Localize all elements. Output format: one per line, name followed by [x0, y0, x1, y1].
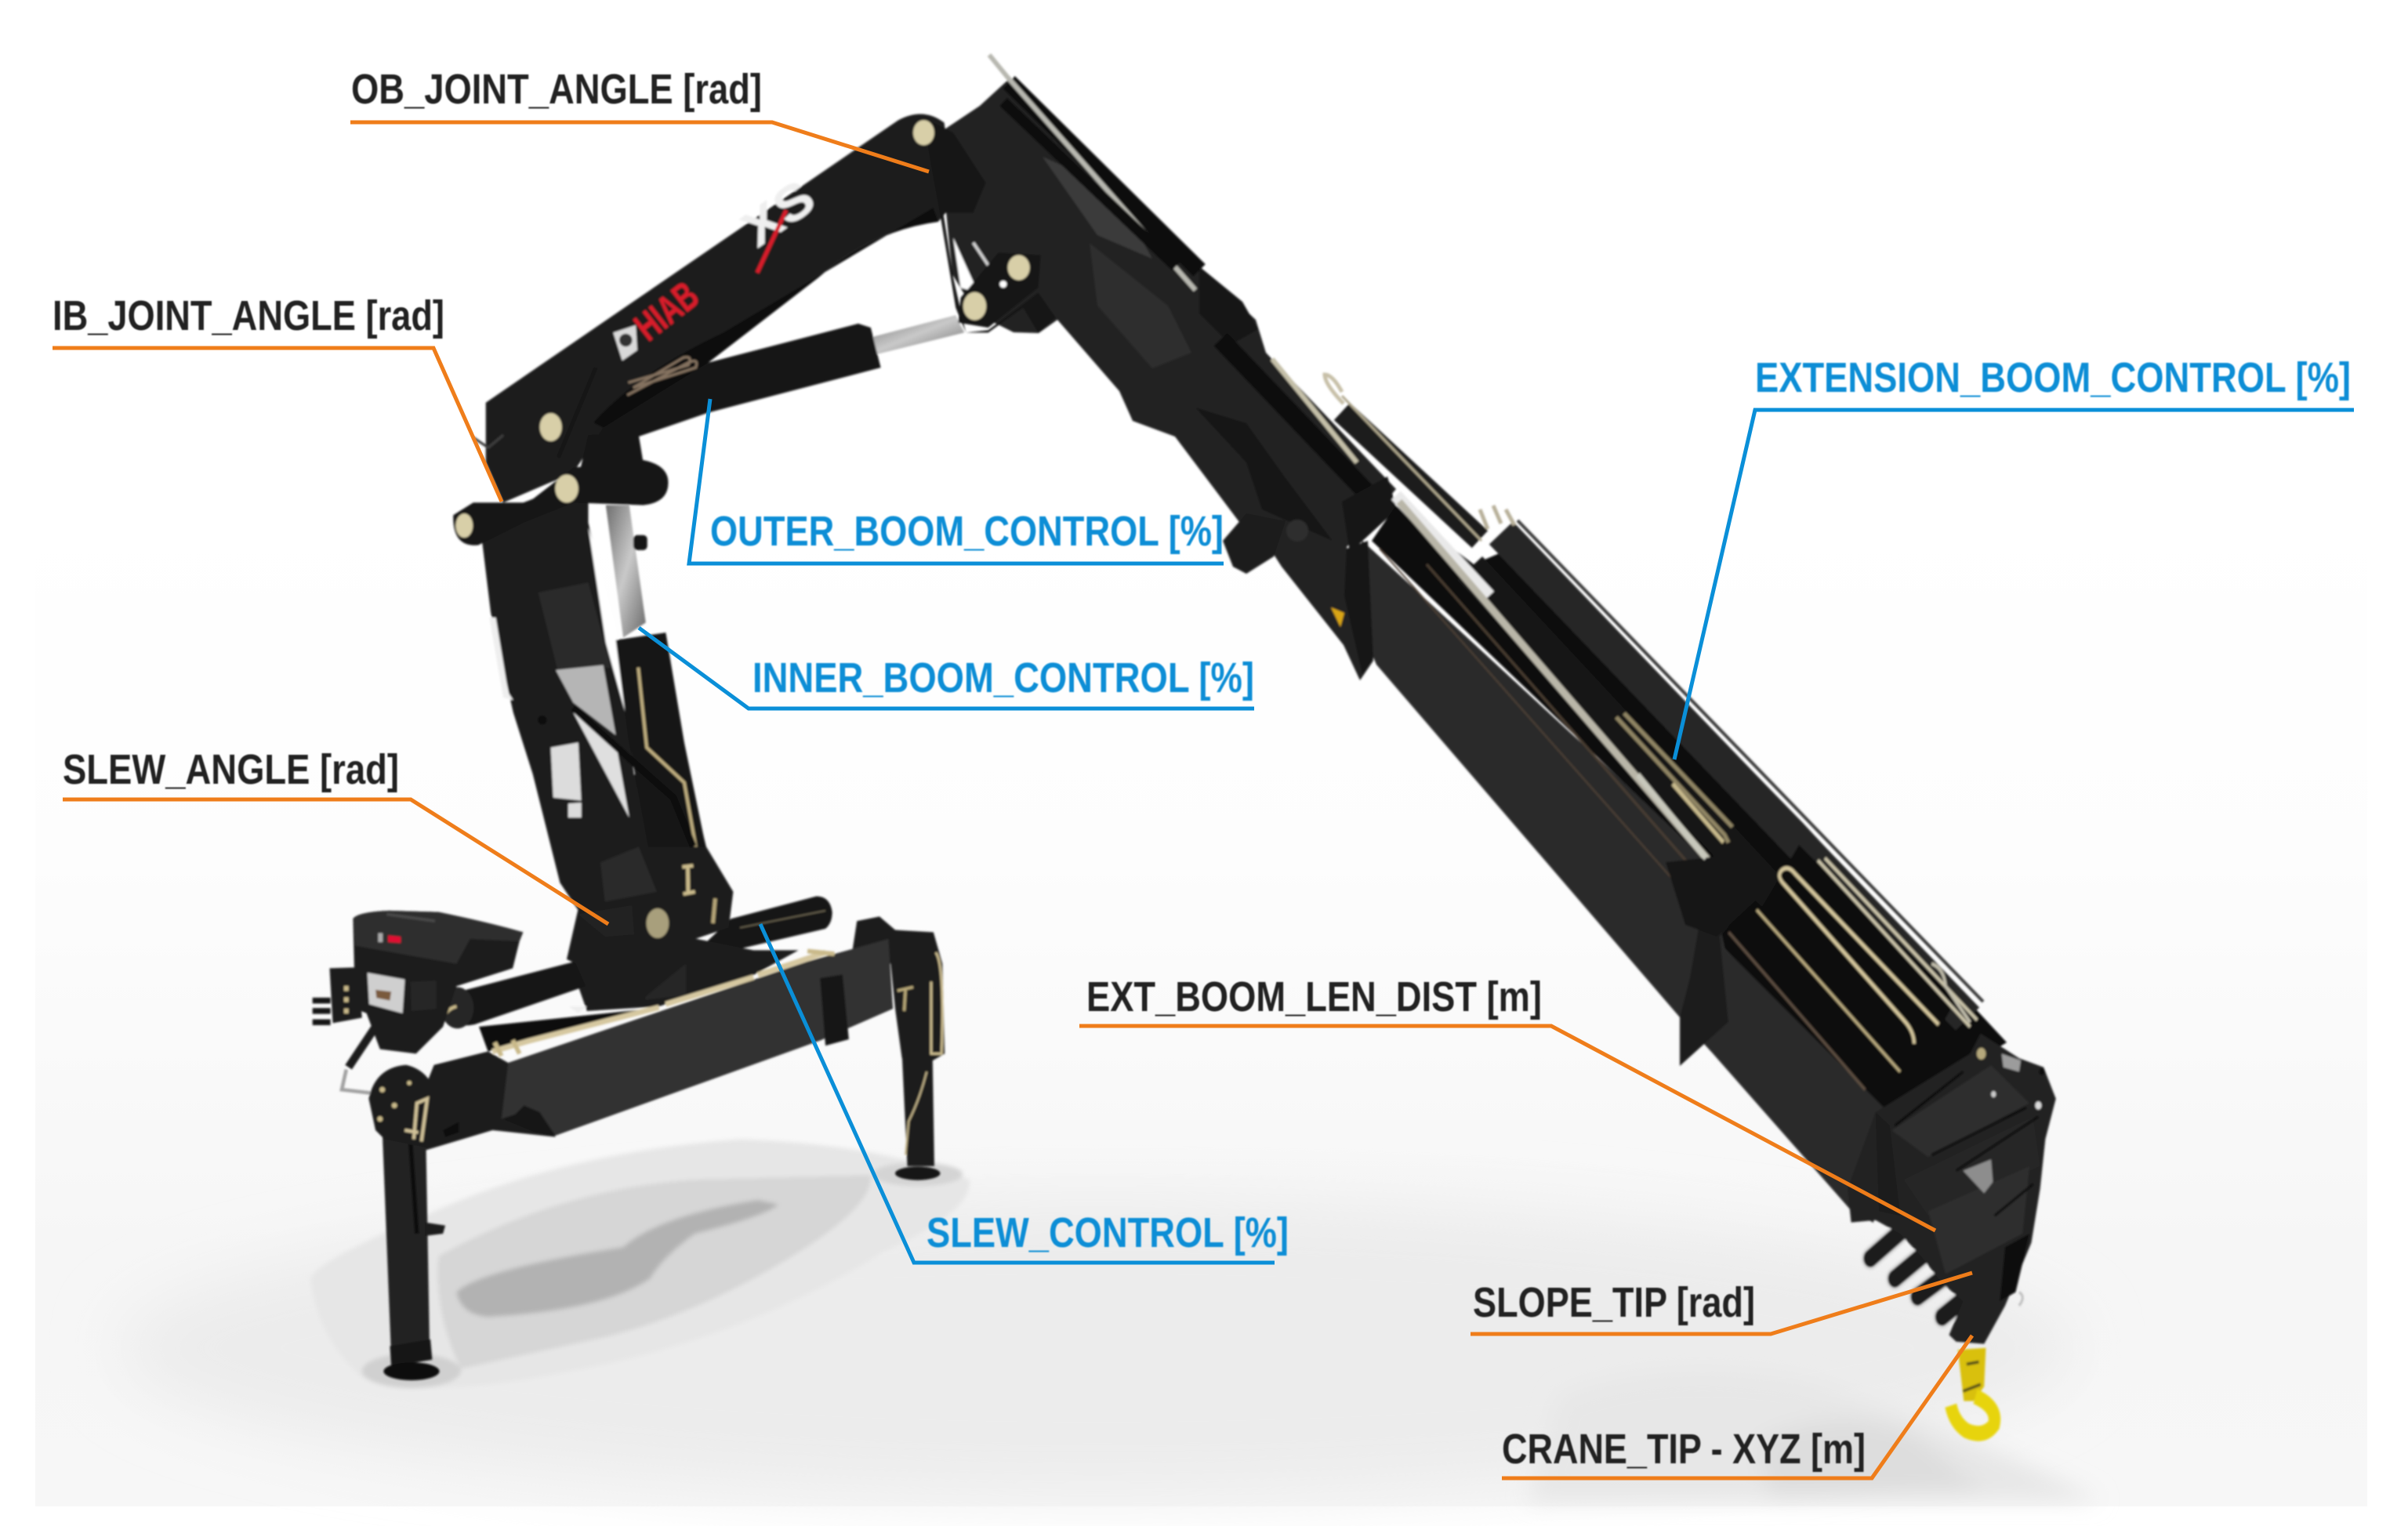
- label: IB_JOINT_ANGLE: [53, 292, 502, 502]
- box lower brown edge: [1380, 549, 1685, 893]
- label: OB_JOINT_ANGLE: OB_JOINT_ANGLE [rad]: [351, 66, 762, 113]
- chrome rail: [1396, 495, 1489, 596]
- control box: [313, 911, 523, 1093]
- tip rods and cables: [1637, 775, 1977, 1089]
- extension boom cylinders: [1470, 568, 1897, 1027]
- label: SLOPE_TIP: [1471, 1273, 1972, 1334]
- outer boom cylinder: [596, 315, 964, 437]
- beam box face: [502, 939, 893, 1136]
- crane base: beam, legs and control box: [313, 897, 945, 1380]
- label: SLEW_CONTROL: SLEW_CONTROL [%]: [927, 1209, 1289, 1256]
- Hiab logo: HIAB: [626, 273, 707, 350]
- rear slew cylinder: [686, 897, 832, 962]
- ground shadow under boom tip: [1529, 1371, 2101, 1501]
- front slew cylinder: [441, 959, 593, 1025]
- label: EXT_BOOM_LEN_DIST: [1079, 973, 1935, 1231]
- label: SLEW_ANGLE: [63, 746, 608, 924]
- label: INNER_BOOM_CONTROL: INNER_BOOM_CONTROL [%]: [752, 654, 1254, 701]
- sling loops: [1870, 1229, 1975, 1317]
- outer boom arm: [453, 114, 1056, 546]
- cable bundle: [1616, 713, 1732, 843]
- hose coil: [627, 357, 697, 395]
- inner boom pedestal: [533, 775, 733, 1004]
- inner boom rod: [606, 505, 646, 637]
- label: EXT_BOOM_LEN_DIST: EXT_BOOM_LEN_DIST [m]: [1086, 973, 1542, 1020]
- yellow hook: [1951, 1348, 1995, 1434]
- main boom: [941, 55, 2007, 1223]
- label: SLEW_CONTROL: [760, 924, 1289, 1263]
- label: OB_JOINT_ANGLE: [350, 66, 929, 172]
- XS logo: XS: [731, 169, 825, 258]
- first boom section: [941, 79, 1396, 680]
- second boom section: [1347, 541, 1897, 1223]
- link plates and upper knuckle: [923, 118, 1056, 332]
- slew housing: [574, 937, 799, 1011]
- Hiab logo: [613, 273, 707, 361]
- warning triangle: [1331, 607, 1344, 627]
- boom clamp: [1680, 896, 1753, 1066]
- floor background: [35, 509, 2367, 1506]
- label: SLEW_ANGLE: SLEW_ANGLE [rad]: [63, 746, 399, 793]
- label: INNER_BOOM_CONTROL: [639, 628, 1254, 709]
- extension cylinder rod: [1342, 411, 1480, 539]
- label: IB_JOINT_ANGLE: IB_JOINT_ANGLE [rad]: [53, 292, 444, 339]
- beam underside: [420, 1052, 556, 1151]
- crane: [313, 55, 2056, 1434]
- joint pins: [455, 120, 1030, 538]
- inner boom column and cylinder: [482, 477, 705, 846]
- label: OUTER_BOOM_CONTROL: OUTER_BOOM_CONTROL [%]: [710, 508, 1224, 555]
- tip body: [1848, 1034, 2056, 1344]
- lower knuckle: [453, 460, 669, 546]
- boom tip section with hook: [1637, 775, 2056, 1434]
- beam top rail: [479, 1009, 650, 1052]
- label: EXTENSION_BOOM_CONTROL: [1674, 354, 2354, 759]
- label: OUTER_BOOM_CONTROL: [689, 399, 1224, 564]
- front stabiliser leg: [368, 1065, 459, 1380]
- label: CRANE_TIP - XYZ: [1502, 1336, 1972, 1478]
- inner boom cylinder: [616, 633, 705, 846]
- rear stabiliser leg: [853, 916, 945, 1180]
- label: CRANE_TIP - XYZ: CRANE_TIP - XYZ [m]: [1502, 1426, 1866, 1473]
- label: SLOPE_TIP: SLOPE_TIP [rad]: [1473, 1279, 1755, 1326]
- dark channel between boom and cylinders: [1372, 506, 2007, 1121]
- upper hydraulic rods: [1009, 82, 1199, 270]
- ground shadow under crane base: [310, 1139, 970, 1388]
